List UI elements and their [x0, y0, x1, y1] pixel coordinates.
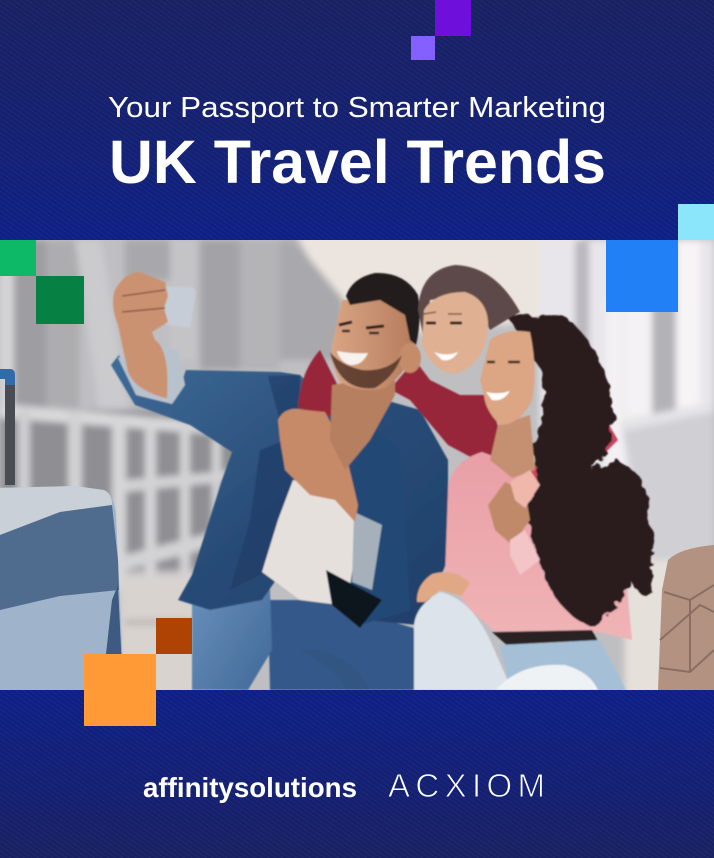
right suitcase: [658, 545, 714, 690]
sleeve cuff: [118, 343, 185, 404]
belt: [492, 630, 600, 648]
hair: [346, 273, 420, 345]
woman: face: [480, 331, 535, 478]
child: red sweater: [298, 350, 505, 462]
woman: pink sweater: [445, 452, 632, 640]
phone in pocket: [326, 570, 382, 628]
smile: [337, 351, 368, 365]
man: head: [330, 273, 421, 470]
neck: [330, 375, 395, 470]
photo background: airport walkway: [0, 230, 714, 700]
title: main heading: UK Travel Trends: [109, 128, 606, 196]
eyes: [487, 361, 520, 363]
family figures: [111, 265, 654, 690]
decorative square: rust: [156, 618, 192, 654]
hair: [417, 264, 521, 334]
ear: [399, 343, 421, 373]
smile: [434, 352, 458, 360]
raised white knee: [414, 592, 512, 690]
blue jeans: [500, 640, 626, 690]
decorative square: cyan: [678, 204, 714, 240]
woman: jeans and belt: [414, 572, 626, 690]
rolled cuff: [352, 512, 382, 590]
decorative square: dark green: [36, 276, 84, 324]
woman: long curly hair: [510, 315, 654, 625]
header background band: [0, 0, 714, 240]
logo: affinity solutions: affinitysolutions: [143, 772, 357, 803]
woman: hand and clasped child's hand: [488, 470, 540, 575]
white t-shirt: [262, 480, 360, 606]
hand on knee: [417, 572, 470, 602]
decorative square: blue: [606, 240, 678, 312]
face: [331, 298, 415, 390]
beard: [330, 352, 402, 388]
eyes and brows: [339, 322, 384, 328]
photo: family taking a selfie: [0, 230, 714, 700]
child: arm around woman: [530, 425, 619, 480]
logo: Acxiom: ACXIOM: [388, 767, 545, 804]
man: jacket and torso: [111, 355, 448, 628]
decorative square: violet: [435, 0, 471, 36]
smile: [486, 391, 510, 400]
eyes: [426, 322, 462, 324]
child: head: [418, 265, 520, 374]
decorative square: bright green: [0, 240, 36, 276]
left suitcase: [0, 369, 124, 690]
footer background band: [0, 690, 714, 858]
man: hand on child arm: [278, 409, 358, 522]
forearm and hand: [113, 272, 168, 398]
decorative square: orange: [84, 654, 156, 726]
man: jeans: [191, 588, 415, 690]
title: subtitle line: Your Passport to Smarter Marketing: [108, 92, 606, 124]
man: selfie arm and phone: [113, 272, 196, 404]
phone: [164, 286, 196, 328]
face: [480, 331, 535, 425]
face: [422, 292, 488, 374]
suitcase handle: [0, 369, 15, 485]
decorative square: light violet: [411, 36, 435, 60]
neck: [490, 415, 535, 478]
